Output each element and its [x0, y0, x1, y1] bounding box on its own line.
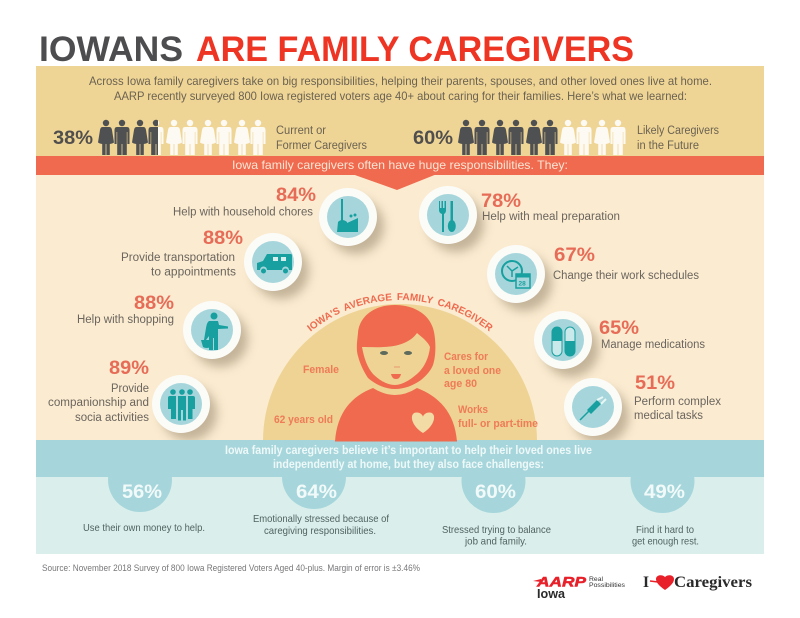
logo: AARP Iowa: Iowa [537, 587, 566, 601]
panel: challenges [36, 440, 764, 554]
item: shopping: 88% [134, 293, 174, 314]
icon: capsules [552, 327, 575, 356]
item: medical tasks [564, 373, 721, 444]
challenge: own money [84, 477, 204, 533]
stat: 60% likely caregivers [413, 120, 719, 155]
stat: 60% likely caregivers: 60% [413, 128, 453, 149]
challenge: own money: Use their own money to help. [83, 522, 205, 534]
caregiver facts: Female [303, 364, 339, 376]
logo: AARP Iowa [533, 574, 625, 601]
challenges heading: Iowa family caregivers believe it’s important to help their loved ones live [225, 443, 592, 457]
logo: AARP Iowa: Possibilities [589, 583, 625, 589]
red banner: Iowa family caregivers often have huge responsibilities. They: [232, 158, 568, 172]
logo: I heart Caregivers: I [643, 574, 649, 591]
intro text: AARP recently surveyed 800 Iowa registered voters age 40+ about caring for their families. Here’s what we learned: [114, 89, 687, 103]
caregiver facts: Cares for [444, 351, 489, 363]
caregiver facts: a loved one [444, 365, 501, 377]
item: transportation [121, 228, 309, 299]
icon: clock and calendar: 28 [518, 280, 526, 288]
challenge: emotionally stressed [254, 477, 389, 536]
item: companionship: companionship and [48, 397, 149, 409]
stat: 60% likely caregivers: in the Future [637, 140, 699, 152]
item: companionship: Provide [111, 383, 149, 395]
stat: 60% likely caregivers: Likely Caregivers [637, 125, 719, 137]
item: work schedules: 67% [554, 245, 595, 266]
icon: group of people [168, 389, 195, 420]
item: companionship: 89% [109, 358, 149, 379]
average caregiver semicircle [263, 293, 538, 440]
caregiver facts: Works [458, 404, 488, 416]
stat: 38% current or former caregivers: Current or [276, 125, 326, 137]
item: work schedules [487, 245, 699, 311]
panel: responsibilities [36, 156, 764, 440]
challenge: enough rest: get enough rest. [632, 536, 699, 548]
caregiver facts: age 80 [444, 378, 477, 390]
item: companionship [48, 358, 217, 441]
item: meal preparation: Help with meal preparation [482, 211, 620, 223]
intro text [89, 74, 712, 103]
challenge: balance job and family: Stressed trying to balance [442, 524, 551, 536]
logo: I heart Caregivers [643, 574, 752, 591]
challenge: balance job and family: 60% [475, 482, 516, 503]
challenges heading: independently at home, but they also face challenges: [273, 457, 544, 471]
item: transportation: 88% [203, 228, 243, 249]
item: medical tasks: Perform complex [634, 396, 721, 408]
logo: AARP Iowa: Real [589, 577, 603, 583]
icon: clock and calendar [502, 261, 530, 288]
challenge: enough rest: Find it hard to [636, 524, 694, 536]
caregiver facts [274, 351, 538, 430]
logo: AARP Iowa: AARP [536, 574, 587, 590]
item: household chores [173, 185, 384, 254]
item: shopping [77, 293, 248, 367]
challenge: emotionally stressed: caregiving responsibilities. [264, 525, 376, 537]
item: medical tasks: 51% [635, 373, 675, 394]
curved heading: IOWA'S AVERAGE FAMILY CAREGIVER [306, 293, 492, 332]
item: medications: 65% [599, 318, 639, 339]
challenge: emotionally stressed: Emotionally stressed because of [253, 513, 389, 525]
challenge: own money: 56% [122, 482, 162, 503]
caregiver facts: 62 years old [274, 414, 333, 426]
item: transportation: Provide transportation [121, 252, 235, 264]
challenge: balance job and family: job and family. [464, 536, 527, 548]
challenge: balance job and family [442, 477, 551, 546]
item: medications [534, 311, 705, 377]
intro text: Across Iowa family caregivers take on big responsibilities, helping their parents, spouses, and other loved ones live at home. [89, 74, 712, 88]
caregiver facts: full- or part-time [458, 418, 538, 430]
item: shopping: Help with shopping [77, 314, 174, 326]
title: IOWANS [39, 30, 183, 69]
item: medical tasks: medical tasks [634, 410, 703, 422]
source note: Source: November 2018 Survey of 800 Iowa Registered Voters Aged 40-plus. Margin of error is ±3.46% [42, 563, 420, 574]
item: transportation: to appointments [151, 266, 236, 278]
icon: syringe [580, 397, 606, 420]
stat: 38% current or former caregivers: 38% [53, 128, 93, 149]
item: companionship: socia activities [75, 412, 149, 424]
stat: 38% current or former caregivers [53, 120, 367, 155]
logo: I heart Caregivers: Caregivers [674, 574, 752, 591]
icon: fork and spoon [439, 201, 456, 232]
woman figure hem [335, 440, 457, 442]
woman figure [335, 305, 457, 442]
panel: survey intro [36, 66, 764, 157]
item: medications: Manage medications [601, 339, 705, 351]
item: meal preparation [419, 186, 620, 252]
item: household chores: Help with household chores [173, 206, 313, 218]
icon: shopper [201, 312, 228, 350]
red banner [36, 156, 764, 190]
item: work schedules: Change their work schedules [553, 270, 699, 282]
icon: van [257, 254, 292, 274]
challenge: enough rest [630, 477, 698, 546]
item: meal preparation: 78% [481, 191, 521, 212]
title: ARE FAMILY CAREGIVERS [196, 30, 634, 69]
challenge: enough rest: 49% [644, 482, 685, 503]
item: household chores: 84% [276, 185, 316, 206]
stat: 38% current or former caregivers: Former Caregivers [276, 140, 367, 152]
challenges heading [225, 443, 592, 471]
icon: mop and bucket [337, 199, 358, 232]
challenge: emotionally stressed: 64% [296, 482, 337, 503]
